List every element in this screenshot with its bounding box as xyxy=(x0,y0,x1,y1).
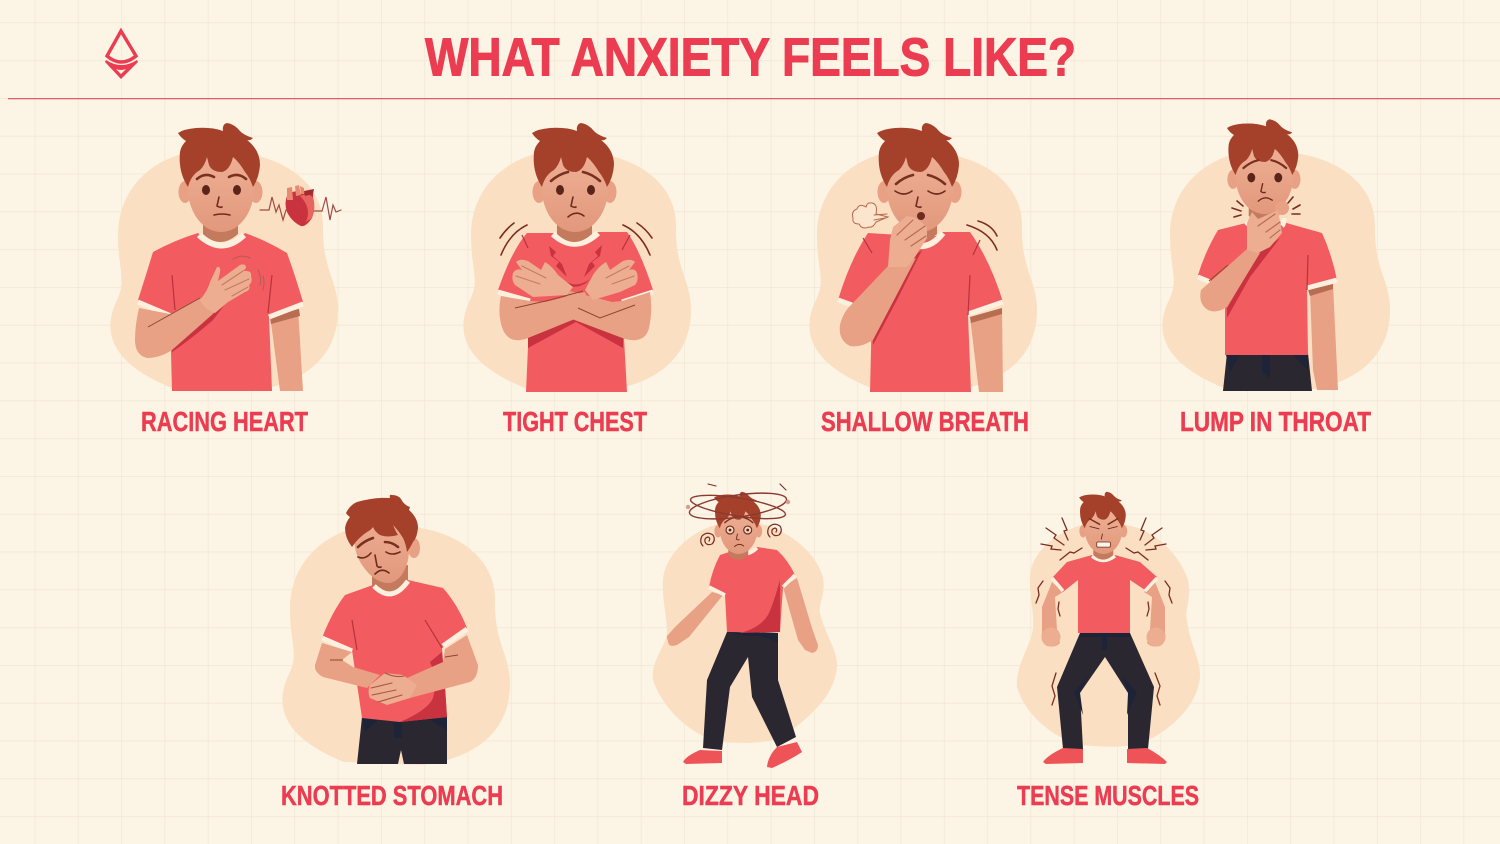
backdrop blob xyxy=(110,150,338,391)
header divider xyxy=(8,98,1500,99)
label: LUMP IN THROAT xyxy=(1180,406,1371,437)
figure xyxy=(667,492,818,768)
figure xyxy=(1198,119,1338,391)
icon: dizzy rings and swirls xyxy=(686,484,790,546)
label: SHALLOW BREATH xyxy=(821,406,1029,437)
figure xyxy=(135,123,303,391)
icon: tension marks xyxy=(1036,518,1172,705)
figure xyxy=(838,123,1003,392)
head: tilted three-quarter view xyxy=(345,495,420,583)
panel: tight chest xyxy=(463,123,691,392)
label: RACING HEART xyxy=(141,406,308,437)
label: TENSE MUSCLES xyxy=(1017,780,1199,811)
figure xyxy=(498,123,653,392)
label: DIZZY HEAD xyxy=(682,780,819,811)
backdrop blob xyxy=(809,150,1037,391)
panel: tense muscles xyxy=(1017,492,1200,764)
icon: logo xyxy=(105,31,138,79)
title: WHAT ANXIETY FEELS LIKE? xyxy=(425,28,1076,88)
label: KNOTTED STOMACH xyxy=(281,780,503,811)
panel: lump in throat xyxy=(1162,119,1390,391)
icon: heart with pulse xyxy=(260,185,341,226)
face: worried xyxy=(551,172,600,217)
panel: racing heart xyxy=(110,123,341,391)
panel: dizzy head xyxy=(653,484,837,768)
face: worried xyxy=(1243,160,1286,201)
figure xyxy=(1036,492,1172,764)
panel: shallow breath xyxy=(809,123,1037,392)
backdrop blob xyxy=(1017,522,1200,747)
figure xyxy=(315,495,478,764)
backdrop blob xyxy=(282,524,510,765)
backdrop blob xyxy=(463,150,691,391)
backdrop blob xyxy=(1162,150,1390,391)
face: clenched xyxy=(1089,519,1118,547)
icon: breath puff xyxy=(852,203,888,228)
face: swirling eyes xyxy=(725,517,753,547)
backdrop blob xyxy=(653,522,837,743)
face: neutral xyxy=(197,175,246,215)
panel: knotted stomach xyxy=(282,495,510,765)
label: TIGHT CHEST xyxy=(503,406,647,437)
face: eyes closed, open mouth xyxy=(895,175,945,220)
